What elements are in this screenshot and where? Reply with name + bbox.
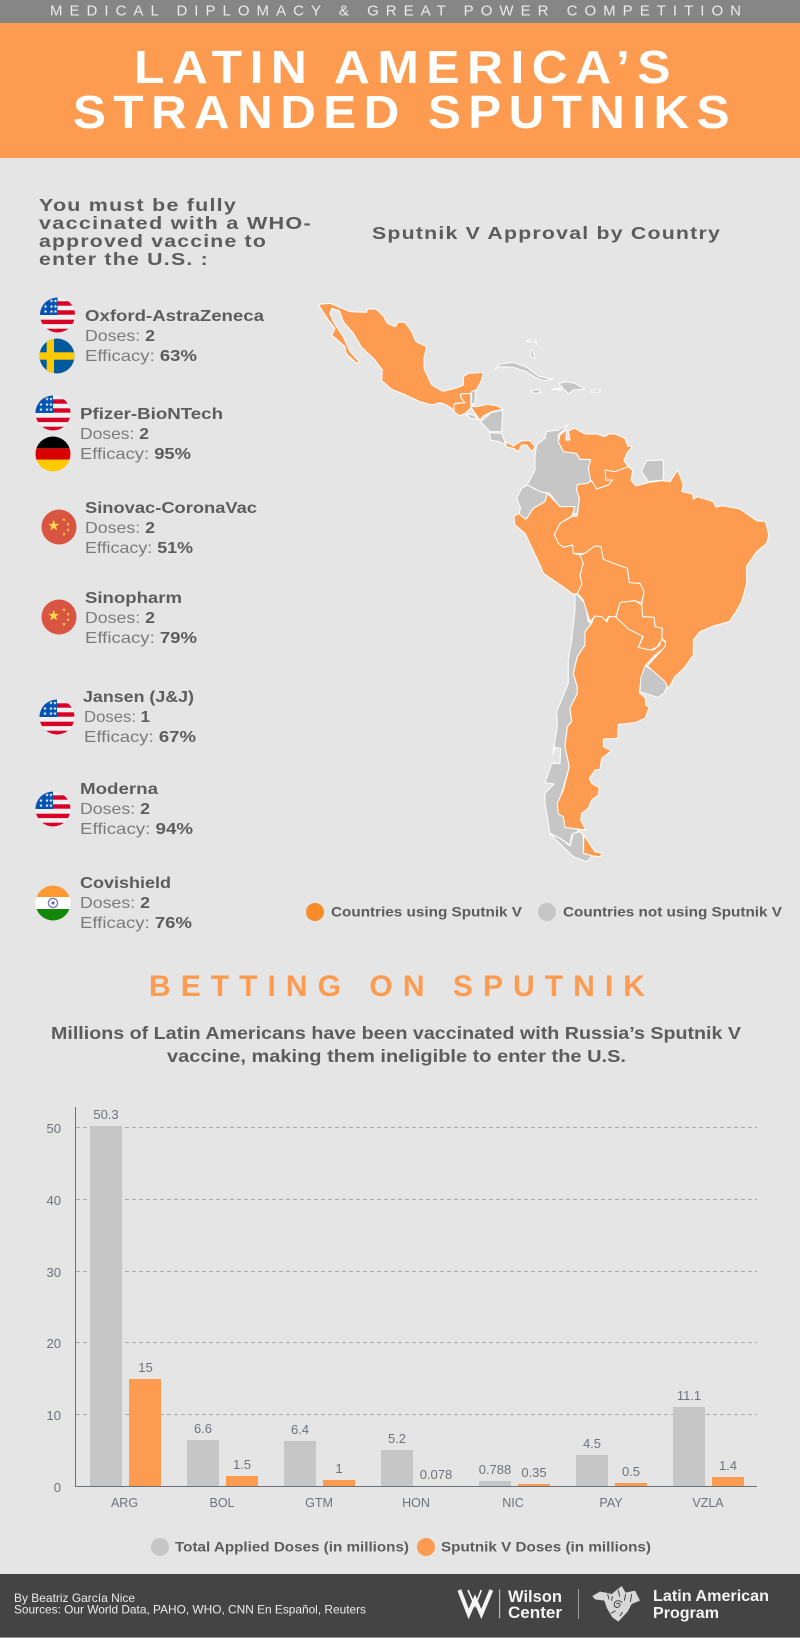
bars: HON: 0.078 [420,1467,452,1482]
vaccine: Jansen: Efficacy: 67% [84,729,196,746]
Wilson Center logo: Center [508,1603,562,1622]
bars: NIC: 0.788 [479,1462,511,1477]
x axis labels: GTM [305,1496,333,1510]
vaccine: Sinopharm: Doses: 2 [85,610,155,627]
Nicaragua [481,410,503,432]
y axis labels: 30 [47,1265,61,1280]
x axis labels [111,1496,724,1510]
Bolivia [577,546,644,622]
bar chart: doses by country [47,1107,757,1510]
Puerto Rico [591,390,600,392]
x axis labels: VZLA [692,1496,724,1510]
Latin American Program logo: Program [653,1605,719,1622]
vaccine: Sinopharm: Efficacy: 79% [85,630,197,647]
footer [0,1574,800,1638]
x axis labels: BOL [209,1496,235,1510]
vaccine: Jansen: Doses: 1 [84,709,150,726]
map heading: Sputnik V Approval by Country [372,223,721,243]
section description: vaccine, making them ineligible to enter the U.S. [167,1046,626,1066]
section description [51,1023,741,1066]
Guatemala [454,393,473,416]
bars: NIC: 0.35 [521,1465,547,1480]
map legend: Countries not using Sputnik V [563,904,783,920]
title banner [0,23,800,158]
Wilson Center logo [459,1587,562,1622]
map legend [306,903,783,921]
Argentina [557,615,666,830]
vaccine: Sinopharm [41,590,197,647]
bars: VZLA: 11.1 [677,1388,701,1403]
chart legend: Total Applied Doses (in millions) [175,1538,409,1554]
x axis labels: NIC [502,1496,524,1510]
Suriname [642,460,663,482]
Mexico [318,303,483,410]
bars: GTM: 1 [335,1461,343,1476]
y axis labels: 40 [47,1193,61,1208]
Colombia [527,424,592,514]
y axis labels: 50 [47,1121,61,1136]
bars: PAY: 4.5 [583,1436,601,1451]
vaccine: Sinopharm: Sinopharm [85,590,182,607]
x axis labels: ARG [111,1496,138,1510]
bars: BOL: 6.6 [194,1421,212,1436]
title banner: STRANDED SPUTNIKS [73,86,737,138]
bars: BOL [187,1421,258,1486]
Hispaniola [552,382,585,394]
top kicker band [0,0,800,23]
Cuba [494,362,553,381]
Paraguay [616,601,662,650]
vaccine: Covishield [35,875,192,932]
y axis labels [47,1121,61,1495]
Panama [506,441,535,452]
Belize [471,390,476,404]
Bahamas south [530,350,535,358]
Honduras [471,404,503,420]
Latin American Program logo [592,1586,769,1622]
vaccine: Covishield: Efficacy: 76% [80,915,192,932]
Mexico, Central America and Caribbean [318,303,600,452]
vaccine: Moderna [35,781,193,838]
y axis labels: 20 [47,1336,61,1351]
Peru [514,493,583,594]
map legend: Countries using Sputnik V [331,904,523,920]
Wilson Center logo: Wilson [508,1587,562,1606]
bars: ARG [90,1107,161,1486]
vaccine: Jansen [39,689,196,746]
bars: PAY: 0.5 [622,1464,640,1479]
Latin American Program logo: Latin American [653,1588,769,1605]
y axis labels: 0 [54,1480,61,1495]
vaccine: Covishield: Doses: 2 [80,895,150,912]
bars: VZLA [673,1388,744,1486]
vaccine: Sinovac-CoronaVac: Efficacy: 51% [85,540,193,557]
vaccine: Sinovac-CoronaVac: Doses: 2 [85,520,155,537]
bars: NIC [479,1462,550,1486]
bars: VZLA: 1.4 [719,1458,737,1473]
Tierra del Fuego, Argentina [584,835,602,857]
vaccine: Pfizer-BioNTech [35,395,223,472]
vaccine requirement heading: vaccinated with a WHO- [39,213,312,233]
bars: GTM: 6.4 [291,1422,309,1437]
Ecuador [517,485,547,519]
vaccine: Jansen: Jansen (J&J) [83,689,194,706]
vaccine: Pfizer-BioNTech: Efficacy: 95% [80,446,191,463]
chart legend [151,1538,651,1556]
Bahamas [527,339,537,345]
Venezuela [558,428,632,489]
vaccine: Oxford-AstraZeneca [39,297,264,374]
logo divider [578,1589,580,1619]
El Salvador [466,414,478,419]
chart legend: Sputnik V Doses (in millions) [441,1538,651,1554]
vaccine: Pfizer-BioNTech: Doses: 2 [80,426,149,443]
vaccine requirement heading [39,195,312,269]
vaccine requirement heading: enter the U.S. : [39,249,209,269]
vaccine: Moderna: Moderna [80,781,158,798]
vaccine: Moderna: Doses: 2 [80,801,150,818]
vaccine: Oxford-AstraZeneca: Oxford-AstraZeneca [85,308,264,325]
vaccine: Oxford-AstraZeneca: Doses: 2 [85,328,155,345]
top kicker band: MEDICAL DIPLOMACY & GREAT POWER COMPETITION [50,2,741,19]
vaccine: Covishield: Covishield [80,875,171,892]
Costa Rica [489,433,506,445]
gridlines [76,1128,757,1414]
southern cone [545,592,668,862]
title banner: LATIN AMERICA’S [134,41,678,93]
vaccine: Pfizer-BioNTech: Pfizer-BioNTech [80,406,223,423]
Uruguay [640,666,668,697]
vaccine requirement heading: You must be fully [39,195,237,215]
x axis labels: PAY [599,1496,623,1510]
credits: By Beatriz García Nice [14,1591,135,1605]
map of Latin America [318,303,769,862]
bars: GTM [284,1422,355,1486]
credits: Sources: Our World Data, PAHO, WHO, CNN En Español, Reuters [14,1602,366,1616]
vaccine: Moderna: Efficacy: 94% [80,821,193,838]
Brazil and the Guianas [554,467,769,688]
bars: ARG: 15 [138,1360,153,1375]
vaccine requirement heading: approved vaccine to [39,231,267,251]
Chile [545,592,592,845]
South America north [514,424,769,688]
x axis labels: HON [402,1496,430,1510]
credits [14,1591,366,1616]
y axis labels: 10 [47,1408,61,1423]
section heading: Betting on Sputnik: BETTING ON SPUTNIK [149,970,655,1003]
bars: BOL: 1.5 [233,1457,251,1472]
vaccine: Sinovac-CoronaVac: Sinovac-CoronaVac [85,500,257,517]
axes [76,1107,757,1486]
bars: HON: 5.2 [388,1431,406,1446]
bars: HON [381,1431,452,1486]
bars: ARG: 50.3 [93,1107,119,1122]
Jamaica [531,389,541,393]
vaccine: Sinovac-CoronaVac [41,500,257,557]
vaccine: Oxford-AstraZeneca: Efficacy: 63% [85,348,197,365]
Tierra del Fuego, Chile [550,832,592,862]
bars: PAY [576,1436,647,1486]
section description: Millions of Latin Americans have been vaccinated with Russia’s Sputnik V [51,1023,741,1043]
